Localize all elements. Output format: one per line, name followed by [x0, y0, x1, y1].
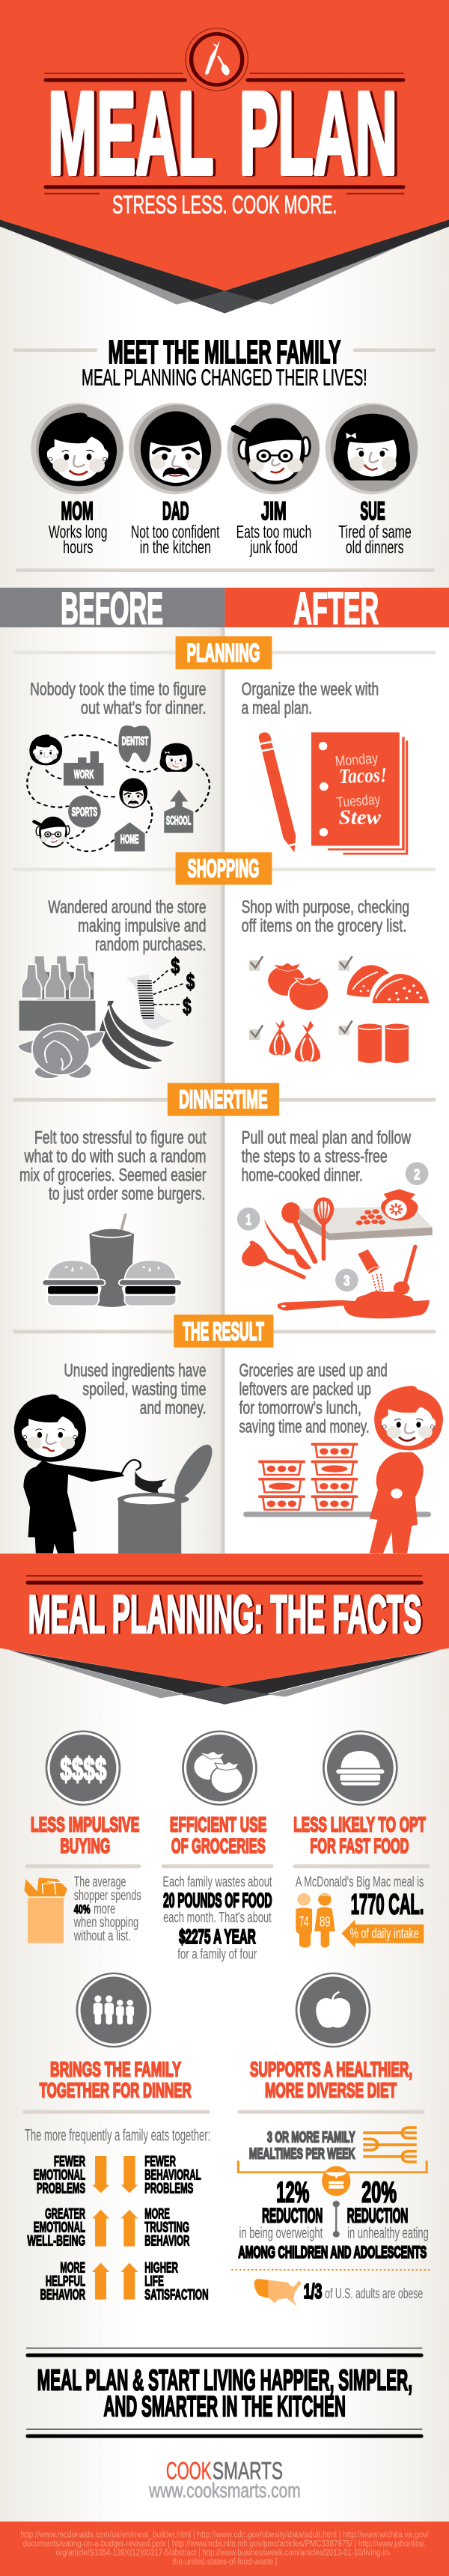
text: family mealtimes: [249, 2128, 355, 2162]
icon: grocery bag: [25, 1878, 67, 1943]
logo: Cook Smarts: COOK: [166, 2458, 212, 2485]
panel: before / after header bar: BEFORE: [61, 583, 163, 633]
text: benefits list right: BEHAVIORAL: [144, 2167, 201, 2183]
icon: checked cans: [338, 1020, 409, 1063]
icon: meal plan notepad: Monday: [335, 750, 379, 770]
icon: six-pack of bottles: [19, 956, 95, 1031]
text: before result: spoiled, wasting time: [82, 1378, 207, 1399]
text: mom caption: Works long: [49, 523, 107, 542]
text: family mealtimes: 3 OR MORE FAMILY: [267, 2128, 355, 2146]
icon: step 1 utensils: 1: [245, 1211, 251, 1228]
icon: work factory: [64, 751, 104, 785]
text: before dinnertime: what to do with such a random: [24, 1145, 207, 1166]
background: after column: [224, 627, 449, 1553]
text: 40 percent more: 40%: [74, 1902, 91, 1916]
text: dad caption: Not too confident: [131, 523, 219, 542]
heading: [250, 2058, 412, 2102]
text: Jim caption: [236, 496, 311, 558]
text: before planning: out what's for dinner.: [81, 697, 207, 718]
text: benefits list left: EMOTIONAL: [34, 2220, 85, 2235]
text: 40 percent more: without a list.: [73, 1928, 131, 1944]
icon: receipt with dollar signs: $: [183, 994, 192, 1019]
text: Sue caption: [338, 496, 412, 558]
heading: OF GROCERIES: [171, 1835, 266, 1858]
text: after result: for tomorrow's lunch,: [239, 1397, 361, 1418]
icon: bananas: [99, 1000, 175, 1070]
icon: receipt with dollar signs: [126, 954, 195, 1030]
icon: cabbage: [17, 1023, 105, 1079]
icon: meal plan notepad: Tuesday: [336, 791, 382, 811]
icon: meal plan notepad: [311, 732, 408, 855]
icon: woman throwing away bananas: [14, 1395, 172, 1553]
text: dad caption: DAD: [162, 496, 189, 525]
text: before planning: [30, 678, 207, 718]
text: before result: [64, 1359, 207, 1418]
icon: happy orange person: [370, 1386, 443, 1553]
icon: home: HOME: [120, 832, 139, 846]
text: mom caption: MOM: [61, 496, 94, 525]
icon: home: [114, 822, 145, 851]
panel: dinnertime illustrations: THE RESULT: [183, 1316, 264, 1345]
text: 12 percent reduction: 12%: [276, 2175, 309, 2208]
title: MEAL: [48, 67, 213, 198]
heading: BRINGS THE FAMILY: [50, 2058, 181, 2081]
panel: footer sources: [0, 2521, 449, 2576]
icon: USA map: [254, 2279, 302, 2307]
panel: fact healthier diet: REDUCTION: [262, 2205, 323, 2227]
chart: chaotic family schedule map: DENTIST: [122, 734, 148, 748]
icon: receipt with dollar signs: $: [171, 954, 180, 978]
text: before dinnertime: [19, 1127, 207, 1204]
icon: dollars badge: $$$$: [60, 1751, 106, 1788]
icon: man 74 percent: 74: [299, 1914, 308, 1930]
heading: shopping label: [176, 852, 272, 885]
panel: planning: [13, 636, 436, 885]
text: before shopping: [48, 896, 207, 954]
text: before dinnertime: mix of groceries. Seemed easier: [19, 1164, 207, 1185]
icon: checked tomatoes: [249, 956, 329, 1011]
icon: mom portrait: [31, 403, 123, 494]
heading: dinnertime label: DINNERTIME: [179, 1085, 268, 1113]
heading: [40, 2058, 192, 2102]
text: after planning: a meal plan.: [242, 697, 312, 718]
text: dad caption: in the kitchen: [140, 538, 211, 558]
text: mom caption: hours: [63, 538, 93, 558]
icon: work factory: WORK: [74, 767, 94, 781]
panel: header banner: [0, 0, 449, 313]
icon: meal plan notepad: Stew: [339, 806, 381, 829]
text: 40 percent more: shopper spends: [74, 1887, 141, 1904]
text: 40 percent more: more: [94, 1901, 115, 1917]
icon: burger in orange circle: [322, 2166, 350, 2196]
panel: meet the family: [13, 333, 436, 572]
arrow: percent of daily intake: [342, 1919, 424, 1948]
text: benefits list right: HIGHER: [144, 2260, 178, 2276]
text: 40 percent more: [73, 1874, 141, 1944]
panel: fact less impulsive buying: [25, 1732, 141, 1944]
chart: chaotic family schedule map: SPORTS: [72, 805, 97, 819]
text: 20 percent reduction: 20%: [361, 2175, 397, 2208]
text: benefits list right: BEHAVIOR: [144, 2233, 189, 2249]
text: benefits list right: MORE: [144, 2206, 170, 2222]
text: after result: [239, 1359, 388, 1437]
heading: planning label: PLANNING: [186, 639, 260, 667]
text: closing statement: [37, 2363, 412, 2423]
icon: leftover containers: [243, 1443, 431, 1517]
logo: Cook Smarts: SMARTS: [213, 2458, 283, 2485]
panel: fact fast food: [293, 1732, 430, 1948]
text: before dinnertime: Felt too stressful to figure out: [34, 1127, 207, 1148]
chart: chaotic family schedule map: SCHOOL: [166, 814, 191, 827]
text: before shopping: random purchases.: [95, 934, 207, 954]
text: before shopping: Wandered around the store: [48, 896, 207, 917]
text: food waste stats: $2275 A YEAR: [179, 1926, 256, 1949]
icon: step 3 pan with seasoning: 3: [343, 1272, 350, 1289]
text: benefits list left: [27, 2154, 85, 2303]
icon: logo knife and spoon in ring: [186, 28, 248, 91]
icon: dad portrait: [129, 403, 222, 494]
text: benefits list right: PROBLEMS: [144, 2181, 193, 2196]
heading: TOGETHER FOR DINNER: [40, 2080, 192, 2102]
panel: dinnertime illustrations: [13, 1162, 436, 1437]
heading: shopping label: SHOPPING: [188, 854, 259, 883]
text: source links: [21, 2529, 429, 2566]
text: website: www.cooksmarts.com: [148, 2479, 301, 2503]
panel: shopping: [13, 896, 436, 1204]
heading: [293, 1814, 426, 1858]
text: benefits list left: GREATER: [45, 2206, 85, 2222]
text: Sue caption: old dinners: [346, 538, 404, 558]
icon: school building: [164, 790, 193, 833]
text: benefits list right: TRUSTING: [144, 2220, 189, 2235]
heading: BUYING: [60, 1835, 110, 1858]
icon: burger badge: [323, 1732, 397, 1805]
text: food waste stats: for a family of four: [177, 1946, 257, 1962]
icon: checked garlic: [249, 1020, 320, 1062]
panel: closing message: [25, 2348, 424, 2503]
icon: family badge: [77, 1973, 150, 2047]
icon: apple badge: [296, 1973, 370, 2047]
text: source links: the-united-states-of-food-waste |: [172, 2556, 277, 2566]
text: after shopping: [242, 896, 409, 936]
panel: facts banner: [0, 1553, 449, 1705]
text: 40 percent more: when shopping: [73, 1914, 138, 1931]
icon: tomatoes badge: [183, 1732, 256, 1805]
icon: burgers and drink: [42, 1215, 182, 1307]
heading: [31, 1814, 139, 1858]
text: dad caption: [131, 496, 219, 558]
heading: the result label: [174, 1315, 273, 1348]
icon: woman 89 percent: 89: [320, 1914, 331, 1930]
panel: fact family dinner: [23, 1973, 210, 2303]
text: after planning: [242, 678, 379, 718]
icon: receipt with dollar signs: $: [186, 969, 195, 994]
background: facts section: [0, 1553, 449, 2521]
text: one third obese: 1/3: [304, 2280, 322, 2304]
icon: dentist tooth: [118, 725, 151, 762]
icon: woman 89 percent: [314, 1893, 335, 1948]
text: benefits list right: FEWER: [144, 2154, 176, 2169]
background: before column: [0, 627, 224, 1553]
icon: dollars badge: [46, 1732, 120, 1805]
panel: result illustrations: [14, 1386, 443, 1553]
text: 20 POUNDS OF FOOD: [163, 1890, 272, 1912]
icon: step 3 pan with seasoning: [277, 1246, 430, 1318]
panel: fact healthier diet: [231, 1973, 431, 2307]
bracket: [238, 2161, 427, 2172]
icon: three forks: [363, 2128, 417, 2162]
heading: EFFICIENT USE: [170, 1814, 266, 1836]
text: before shopping: making impulsive and: [78, 915, 207, 936]
text: 12 percent reduction: [239, 2175, 323, 2241]
icon: Sue portrait: [326, 403, 418, 494]
text: family intro: The more frequently a family eats together:: [25, 2127, 210, 2145]
heading: dinnertime label: [168, 1083, 279, 1116]
connector between stats: [333, 2201, 340, 2238]
heading: [170, 1814, 266, 1858]
chart: chaotic family schedule map: [27, 725, 210, 851]
heading: LESS IMPULSIVE: [31, 1814, 139, 1836]
text: food waste stats: [162, 1874, 272, 1962]
icon: step 2 chopping board: 2: [414, 1166, 420, 1183]
text: after dinnertime: home-cooked dinner.: [242, 1164, 363, 1185]
text: benefits list left: BEHAVIOR: [40, 2287, 85, 2303]
text: benefits list left: FEWER: [54, 2154, 85, 2169]
text: food waste stats: Each family wastes about: [162, 1874, 272, 1890]
text: family mealtimes: MEALTIMES PER WEEK: [249, 2145, 355, 2162]
arrow: up and down indicators: [92, 2156, 138, 2300]
text: before planning: Nobody took the time to figure: [30, 678, 207, 699]
icon: pencil: [259, 732, 296, 852]
icon: checked tacos: [338, 956, 429, 1003]
text: 40 percent more: The average: [74, 1874, 126, 1890]
text: before result: Unused ingredients have: [64, 1359, 207, 1380]
text: benefits list left: PROBLEMS: [37, 2181, 85, 2196]
text: mom caption: [49, 496, 107, 558]
text: after dinnertime: [242, 1127, 411, 1185]
text: benefits list left: WELL-BEING: [27, 2233, 85, 2249]
icon: meal plan notepad: Tacos!: [339, 764, 388, 788]
text: Jim caption: junk food: [249, 538, 298, 558]
icon: step 1 utensils: [237, 1202, 315, 1277]
text: benefits list left: EMOTIONAL: [34, 2167, 85, 2183]
heading: planning label: [176, 636, 272, 669]
icon: sports ball: [68, 795, 101, 828]
text: benefits list right: LIFE: [144, 2274, 164, 2289]
text: before dinnertime: to just order some burgers.: [49, 1183, 205, 1204]
panel: fact efficient use of groceries: [161, 1732, 273, 1962]
text: benefits list right: [144, 2154, 209, 2303]
text: benefits list right: SATISFACTION: [144, 2287, 209, 2303]
text: 20 percent reduction: [347, 2175, 429, 2241]
text: Sue caption: SUE: [360, 496, 385, 525]
icon: man 74 percent: [296, 1893, 312, 1948]
text: before result: and money.: [140, 1397, 207, 1418]
text: benefits list left: HELPFUL: [46, 2274, 85, 2289]
icon: step 2 chopping board: [299, 1162, 433, 1259]
text: 12 percent reduction: in being overweight: [239, 2224, 323, 2241]
text: benefits list left: MORE: [60, 2260, 85, 2276]
text: food waste stats: each month. That's about: [163, 1910, 272, 1925]
background: top section: [0, 0, 449, 588]
icon: trash can: [117, 1440, 219, 1553]
icon: Jim portrait: [227, 403, 320, 494]
text: Jim caption: Eats too much: [236, 523, 311, 542]
text: one third obese: [304, 2280, 423, 2304]
text: Jim caption: JIM: [261, 496, 287, 525]
panel: before / after header bar: [0, 583, 449, 633]
